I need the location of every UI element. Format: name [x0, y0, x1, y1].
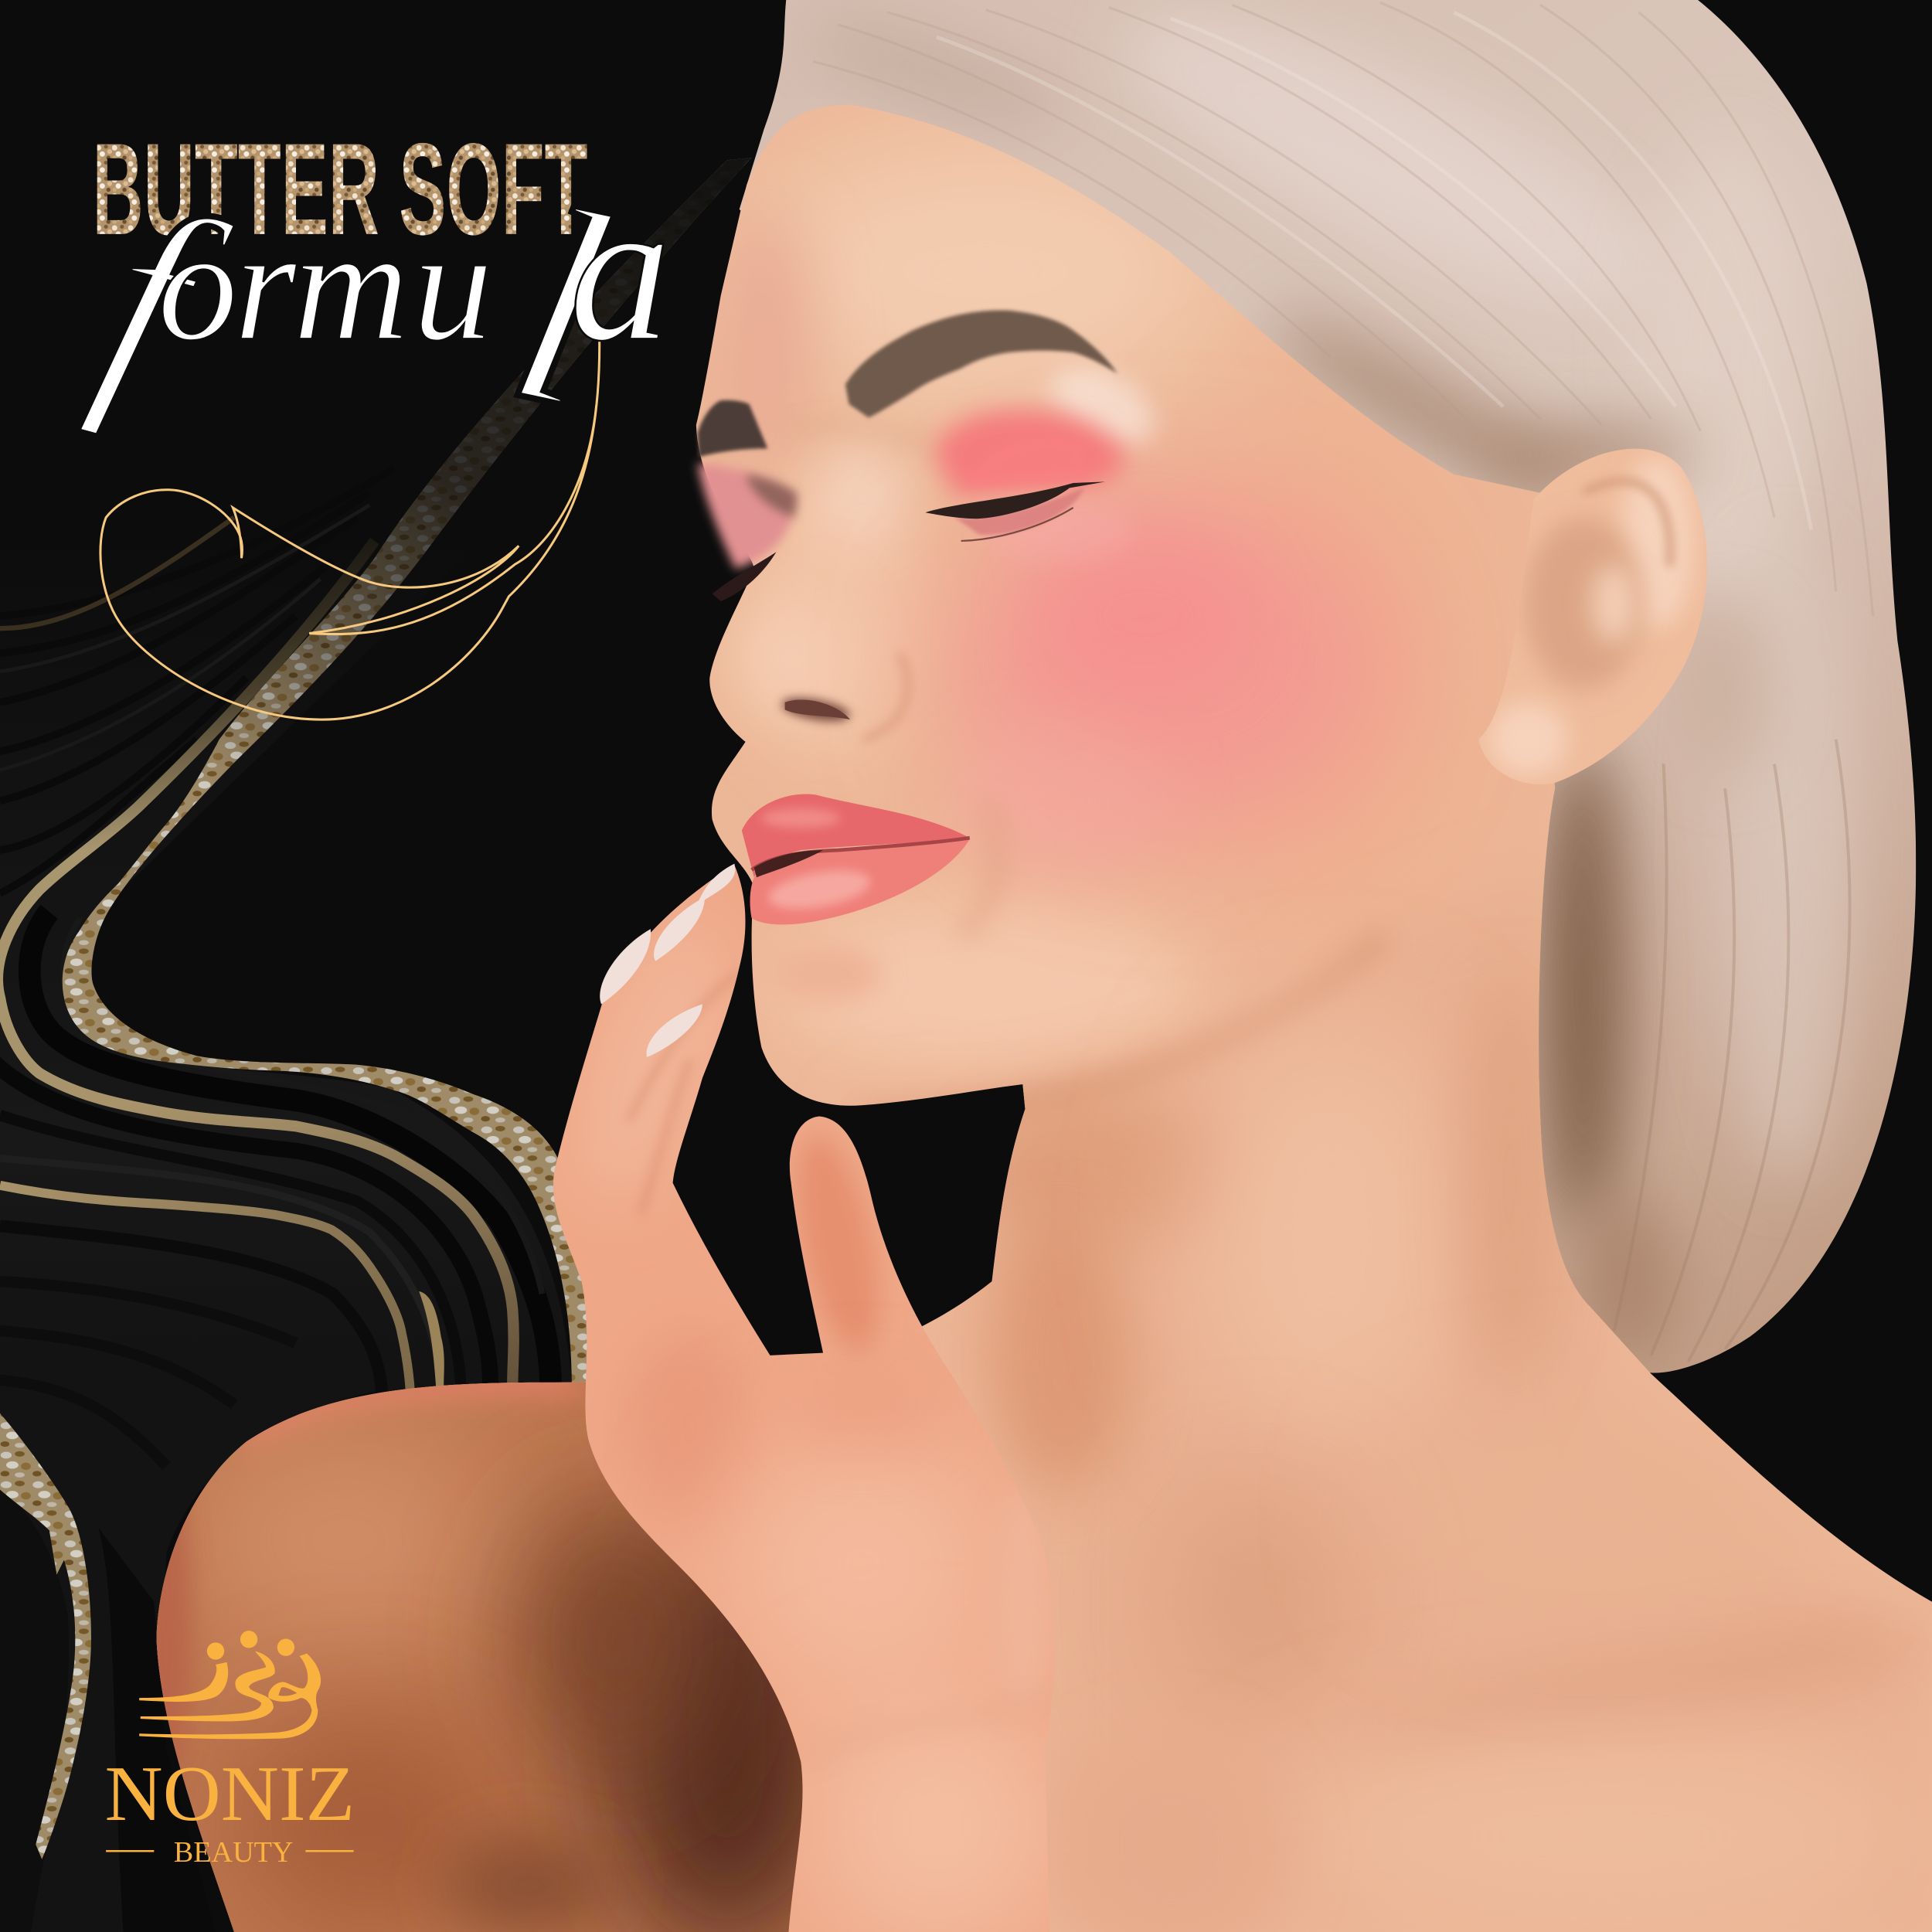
- logo calligraphy mark: [139, 1631, 321, 1739]
- wordmark: beauty: BEAUTY: [174, 1836, 293, 1869]
- title: formula script: f: [73, 149, 253, 460]
- blonde hair: [727, 0, 1932, 1393]
- gold feather line art: [100, 342, 600, 719]
- title: formula script: r: [234, 196, 298, 373]
- eyeshadow, eye and eyebrows: [697, 311, 1128, 601]
- brand logo: [105, 1631, 355, 1869]
- fingernails: [600, 864, 735, 1057]
- lower glitter band: [0, 1413, 91, 1859]
- nose and mouth modelling: [770, 653, 998, 1003]
- shading: neck and chest: [850, 862, 1932, 1932]
- title: formula script: o: [158, 196, 238, 373]
- glitter band: [63, 158, 752, 1386]
- title: butter soft: BUTTER SOFT: [93, 116, 588, 262]
- ear: [1466, 419, 1725, 801]
- title: formula script: m: [293, 196, 409, 373]
- lips: [742, 794, 970, 924]
- title: formula script: a: [570, 158, 671, 383]
- title: formula script: l: [490, 145, 632, 468]
- gold veins: [0, 541, 514, 1386]
- title: formula script: u: [413, 196, 493, 373]
- shading: face: [715, 135, 1478, 1072]
- hand with fingers: [530, 850, 1072, 1932]
- shading: left shoulder: [123, 1349, 862, 1932]
- marble swirl artwork: [0, 158, 752, 1932]
- wordmark: noniz: NONIZ: [105, 1750, 355, 1838]
